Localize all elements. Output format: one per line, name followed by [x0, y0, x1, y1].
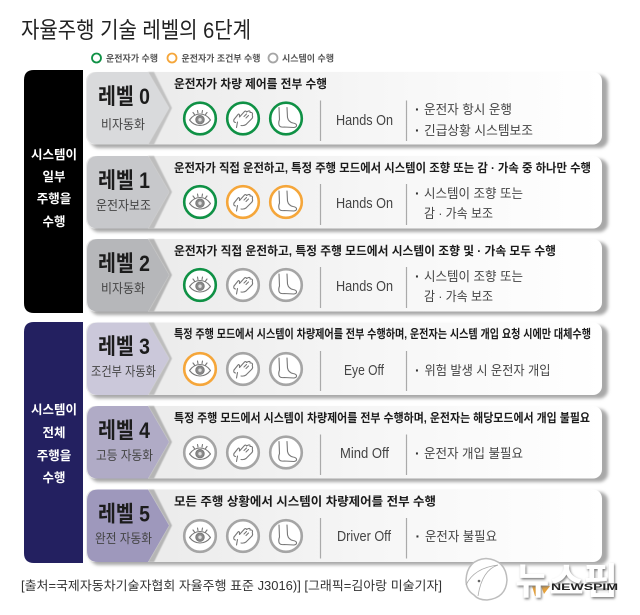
description: 운전자가 직접 운전하고, 특정 주행 모드에서 시스템이 조향 및 · 가속 모두 수행 — [174, 243, 556, 258]
title: 자율주행 기술 레벨의 6단계 — [21, 18, 251, 43]
level badge: 조건부 자동화 — [91, 364, 156, 379]
legend item: driver: 운전자가 수행 — [106, 52, 158, 64]
panel: system full driving: 시스템이 — [31, 403, 77, 417]
icon: eye — [184, 103, 216, 134]
panel: system partial driving: 수행 — [42, 214, 66, 229]
notes: 운전자 불필요 — [425, 529, 497, 544]
source credit: [출처=국제자동차기술자협회 자율주행 표준 J3016)] [그래픽=김아랑 미술기자] — [21, 578, 442, 593]
notes: 운전자 항시 운행 — [424, 102, 512, 117]
notes: 위험 발생 시 운전자 개입 — [424, 363, 550, 378]
notes: · — [416, 528, 420, 544]
mode: Mind Off — [340, 446, 390, 462]
level badge: 레벨 4 — [98, 418, 151, 443]
logo english wordmark: NEWSPIM — [551, 582, 618, 593]
mode: Eye Off — [344, 363, 385, 379]
mode: Hands On — [336, 279, 393, 295]
mode: Hands On — [336, 113, 393, 129]
level badge: 레벨 0 — [98, 84, 150, 109]
panel: level 3 — [86, 322, 608, 398]
legend item: system: 시스템이 수행 — [282, 52, 334, 64]
description: 운전자가 직접 운전하고, 특정 주행 모드에서 시스템이 조향 또는 감 · 가속 중 하나만 수행 — [174, 160, 591, 175]
icon: eye — [184, 353, 216, 385]
level badge: 레벨 1 — [98, 168, 150, 193]
icon: eye — [184, 269, 216, 301]
logo: newspim watermark — [466, 558, 618, 602]
icon: foot — [270, 103, 302, 134]
panel: system full driving: 전체 — [42, 426, 66, 440]
panel: level 1 — [86, 156, 608, 232]
level badge: 레벨 2 — [98, 251, 150, 276]
level badge — [87, 156, 169, 228]
legend — [92, 52, 334, 64]
notes: 시스템이 조향 또는 — [424, 269, 523, 284]
description: 특정 주행 모드에서 시스템이 차량제어를 전부 수행하며, 운전자는 해당모드에서 개입 불필요 — [174, 410, 590, 425]
logo emblem — [466, 558, 507, 600]
legend item: conditional driver: 운전자가 조건부 수행 — [182, 52, 260, 64]
panel: system full driving: 주행을 — [37, 448, 71, 463]
level badge — [87, 72, 169, 144]
description: 운전자가 차량 제어를 전부 수행 — [174, 76, 327, 91]
icon: hand — [227, 520, 259, 552]
level badge — [87, 490, 169, 562]
notes: 시스템이 조향 또는 — [424, 186, 523, 201]
panel: level 4 — [86, 406, 608, 482]
notes: 감 · 가속 보조 — [424, 289, 493, 304]
logo accent — [532, 586, 550, 596]
notes — [415, 185, 523, 221]
icon: hand — [227, 353, 259, 385]
panel: level 2 — [86, 239, 608, 315]
level badge: 비자동화 — [101, 117, 145, 132]
icon: foot — [270, 269, 302, 301]
panel: system partial driving: 시스템이 — [31, 148, 77, 162]
icon: hand — [227, 186, 259, 218]
icon: hand — [227, 269, 259, 301]
panel: system partial driving: 주행을 — [37, 191, 71, 206]
panel: system partial driving: 일부 — [42, 170, 66, 184]
notes: · — [415, 122, 420, 138]
level badge — [87, 239, 169, 312]
icon: hand — [227, 437, 259, 468]
level badge: 운전자보조 — [96, 198, 151, 213]
icon: eye — [184, 186, 216, 218]
notes: 감 · 가속 보조 — [424, 206, 493, 221]
icon: eye — [184, 520, 216, 552]
notes: · — [415, 268, 420, 284]
panel: level 5 — [86, 490, 608, 565]
icon: foot — [270, 186, 302, 218]
notes: 긴급상황 시스템보조 — [424, 123, 533, 138]
notes: · — [415, 101, 420, 117]
logo wordmark: 뉴스핌 — [515, 561, 618, 602]
icon: foot — [270, 520, 302, 552]
level badge: 레벨 3 — [98, 334, 150, 359]
panel: system partial driving — [24, 70, 83, 313]
notes: 운전자 개입 불필요 — [424, 446, 523, 461]
notes — [415, 101, 533, 138]
icon: hand — [227, 103, 259, 134]
panel: system full driving: 수행 — [42, 470, 66, 485]
panel: level 0 — [86, 72, 608, 148]
icon: foot — [270, 353, 302, 385]
icon: eye — [184, 437, 216, 468]
icon: foot — [270, 437, 302, 468]
description: 모든 주행 상황에서 시스템이 차량제어를 전부 수행 — [174, 494, 436, 508]
mode: Hands On — [336, 196, 393, 212]
notes: · — [415, 362, 420, 378]
level badge: 고등 자동화 — [96, 448, 153, 463]
level badge — [87, 322, 169, 395]
level badge: 레벨 5 — [98, 502, 150, 526]
notes — [415, 268, 523, 304]
panel: system full driving — [24, 322, 83, 563]
notes: · — [415, 445, 420, 461]
level badge: 비자동화 — [101, 281, 145, 296]
level badge: 완전 자동화 — [95, 531, 152, 546]
notes: · — [415, 185, 420, 201]
level badge — [87, 406, 169, 478]
mode: Driver Off — [337, 529, 392, 545]
